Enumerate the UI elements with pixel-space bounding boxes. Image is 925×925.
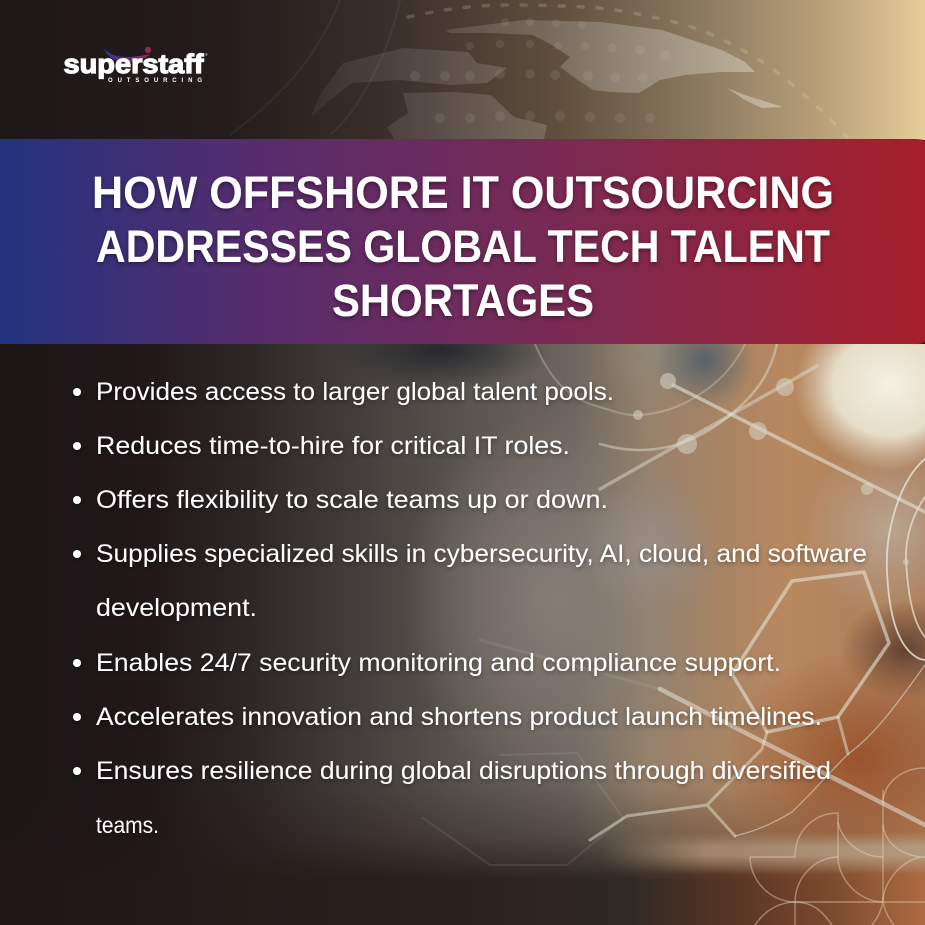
bullet: resilience: Ensures resilience during global disruptions through diversified — [96, 757, 831, 785]
network nodes — [633, 373, 909, 565]
logo wordmark: superstaff — [64, 49, 204, 79]
bullet: security monitoring: Enables 24/7 security monitoring and compliance support. — [96, 649, 781, 677]
network and hexagon lines — [423, 344, 925, 865]
bullet: innovation: Accelerates innovation and shortens product launch timelines. — [96, 703, 822, 731]
globe dot grid — [410, 18, 670, 123]
logo dot — [145, 47, 151, 53]
bullet: resilience — [73, 757, 831, 838]
title: HOW OFFSHORE IT OUTSOURCING — [92, 167, 834, 218]
bullet: specialized skills: development. — [96, 594, 257, 622]
title: ADDRESSES GLOBAL TECH TALENT — [96, 221, 830, 272]
logo tagline: OUTSOURCING — [108, 78, 202, 84]
bullet list — [73, 378, 867, 838]
globe landmasses — [311, 20, 783, 139]
title band — [0, 139, 925, 344]
bullet: specialized skills: Supplies specialized skills in cybersecurity, AI, cloud, and software — [96, 540, 867, 568]
bullet: specialized skills — [73, 540, 867, 622]
title — [92, 167, 834, 326]
photo colour patches — [360, 344, 925, 834]
globe rim dots — [408, 5, 847, 137]
decorative outline shapes bottom right — [750, 768, 925, 925]
bullet: resilience: teams. — [96, 812, 159, 838]
bullet: time-to-hire: Reduces time-to-hire for critical IT roles. — [96, 432, 570, 460]
background: lower blurred office photo — [178, 344, 925, 925]
logo: superstaff outsourcing — [64, 47, 208, 84]
globe faint meridians — [230, 0, 400, 135]
bullet: flexibility: Offers flexibility to scale teams up or down. — [96, 486, 608, 514]
logo registered mark: ® — [205, 52, 208, 57]
bullet: talent pools: Provides access to larger global talent pools. — [96, 378, 614, 406]
title: SHORTAGES — [332, 275, 594, 326]
logo swoosh — [103, 48, 150, 62]
background: top globe section — [222, 0, 925, 140]
background floor and shelf band — [206, 791, 925, 925]
